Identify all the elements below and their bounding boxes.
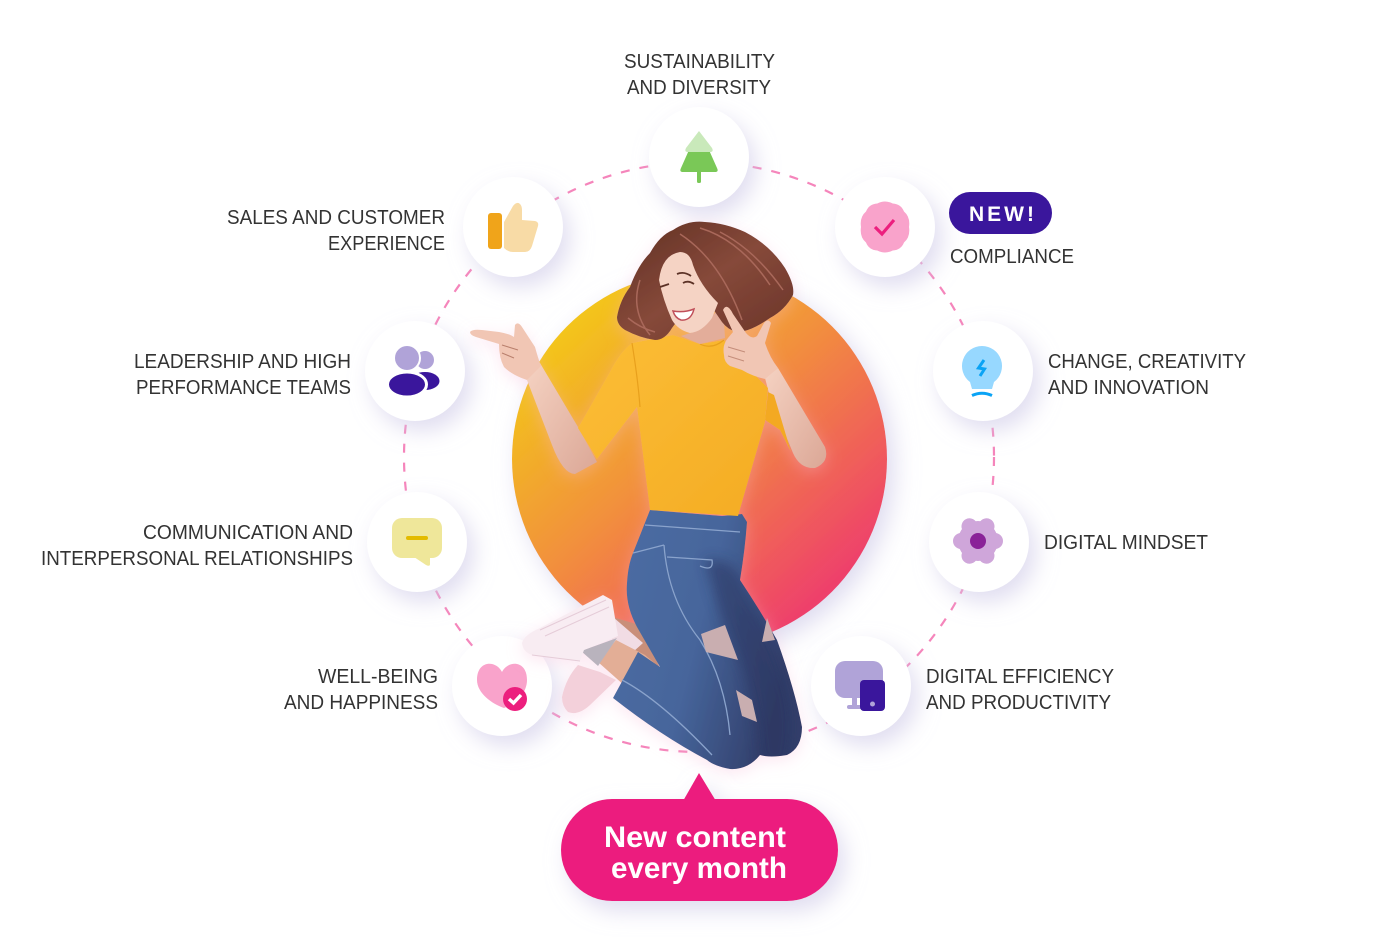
label: well-being [284, 666, 438, 714]
jeans [613, 510, 802, 769]
right arm [765, 368, 826, 468]
infographic [42, 54, 1246, 918]
node: digital mindset [929, 492, 1029, 592]
label: sales [227, 207, 445, 255]
node: leadership [365, 321, 465, 421]
label: digital efficiency [926, 666, 1114, 714]
icon: heart with check [477, 664, 527, 711]
callout text [604, 821, 787, 885]
gradient sun circle [512, 272, 887, 646]
label: sales: EXPERIENCE [328, 233, 445, 255]
label: sustainability [624, 51, 775, 99]
node: sales [463, 177, 563, 277]
label: sustainability: SUSTAINABILITY [624, 51, 775, 73]
label: compliance: COMPLIANCE [950, 246, 1074, 268]
label: sustainability: AND DIVERSITY [627, 77, 771, 99]
label: leadership [134, 351, 351, 399]
label: leadership: PERFORMANCE TEAMS [136, 377, 351, 399]
label: communication: INTERPERSONAL RELATIONSHIPS [41, 548, 353, 570]
label: change [1048, 351, 1246, 399]
label: leadership: LEADERSHIP AND HIGH [134, 351, 351, 373]
icon: thumbs up [488, 203, 538, 252]
thumbs hand [723, 307, 778, 379]
node: digital efficiency [811, 636, 911, 736]
node: sustainability [649, 107, 749, 207]
label: communication [41, 522, 353, 570]
icon: light bulb [962, 346, 1002, 396]
face [659, 252, 718, 333]
node: change [933, 321, 1033, 421]
jeans tears [701, 618, 775, 722]
callout: new content [561, 773, 838, 901]
icon: monitor and tablet [835, 661, 885, 711]
node: compliance [835, 177, 935, 277]
label: well-being: AND HAPPINESS [284, 692, 438, 714]
person jumping [470, 222, 826, 770]
jeans seams [622, 525, 740, 755]
upper shoe [522, 595, 618, 661]
icon: verified badge [861, 202, 909, 252]
shirt back sleeve [765, 392, 791, 452]
icon: chat bubble [392, 518, 442, 566]
label: well-being: WELL-BEING [318, 666, 438, 688]
node: communication [367, 492, 467, 592]
callout text: New content [604, 821, 786, 854]
icon: tree [680, 131, 718, 183]
label: change: CHANGE, CREATIVITY [1048, 351, 1246, 373]
lower shin [598, 640, 660, 686]
label: communication: COMMUNICATION AND [143, 522, 353, 544]
pointing hand [470, 323, 541, 380]
shirt [578, 335, 768, 516]
lower shoe [562, 665, 616, 713]
icon: people [388, 345, 440, 397]
callout text: every month [611, 852, 787, 885]
sock [581, 638, 617, 666]
node: well-being [452, 636, 552, 736]
badge: new: NEW! [969, 203, 1034, 226]
label: sales: SALES AND CUSTOMER [227, 207, 445, 229]
dashed ring [404, 162, 994, 752]
back of thigh [612, 617, 660, 668]
neck [681, 306, 725, 344]
label: digital efficiency: AND PRODUCTIVITY [926, 692, 1111, 714]
hair [617, 222, 793, 340]
icon: gear [958, 521, 998, 561]
jeans shading [705, 559, 792, 770]
label: change: AND INNOVATION [1048, 377, 1209, 399]
left arm [527, 363, 597, 474]
label: digital efficiency: DIGITAL EFFICIENCY [926, 666, 1114, 688]
badge: new [949, 192, 1052, 234]
back shoe [612, 617, 643, 652]
label: digital mindset: DIGITAL MINDSET [1044, 532, 1208, 554]
